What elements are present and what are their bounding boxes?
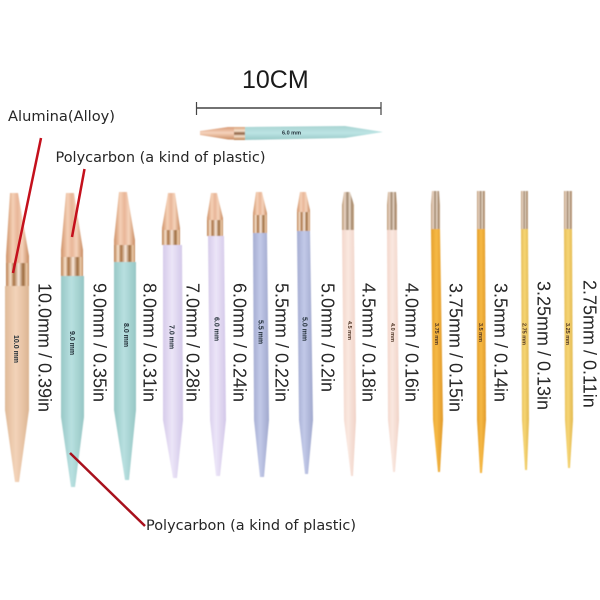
needle 9.0 mm [61,193,84,487]
callout text: polycarbon lower: Polycarbon (a kind of plastic) [146,518,356,534]
needle 7.0 mm [162,193,183,478]
needle 3.75 mm: 3.75 mm [433,323,439,345]
label 4.5mm: 4.5mm / 0.18in [358,283,378,402]
needle 3.5 mm: 3.5 mm [477,323,483,342]
label 8.0mm: 8.0mm / 0.31in [140,283,160,402]
label 3.75mm: 3.75mm / 0.15in [446,283,466,412]
callout text: polycarbon upper: Polycarbon (a kind of plastic) [56,150,266,166]
needle 2.75 mm mark: 2.75 mm [520,323,526,345]
needle 6.0 mm [207,193,226,476]
label 4.0mm: 4.0mm / 0.16in [402,283,422,402]
label 10.0mm: 10.0mm / 0.39in [34,283,54,412]
needle 9.0 mm: 9.0 mm [68,331,75,355]
needle 3.25 mm mark: 3.25 mm [564,323,570,345]
needle 10.0 mm: 10.0 mm [12,335,19,363]
label 5.5mm: 5.5mm / 0.22in [272,283,292,402]
needle 5.5 mm [253,192,269,477]
callout line: polycarbon upper [72,169,84,237]
needle 3.25 mm mark [564,191,573,468]
needle 2.75 mm mark [520,191,529,470]
needle 5.0 mm [297,192,313,474]
needle 3.5 mm [477,191,486,473]
label 3.5mm: 3.5mm / 0.14in [490,283,510,402]
label 2.75mm: 2.75mm / 0.11in [580,280,600,408]
needle 7.0 mm: 7.0 mm [168,325,174,349]
needle 5.0 mm: 5.0 mm [300,317,308,341]
sample needle: 6.0 mm [282,130,301,136]
label 6.0mm: 6.0mm / 0.24in [230,283,250,402]
label 9.0mm: 9.0mm / 0.35in [90,283,110,402]
needle 8.0 mm [114,192,136,480]
needle 3.75 mm [431,191,443,472]
label 3.25mm: 3.25mm / 0.13in [534,281,554,410]
callout line: alumina [13,138,41,273]
needle 8.0 mm: 8.0 mm [122,323,129,347]
callout line: polycarbon lower [70,453,145,526]
needle 4.5 mm: 4.5 mm [346,321,352,340]
needle 4.5 mm [342,192,356,476]
callout text: alumina: Alumina(Alloy) [8,109,115,125]
title: 10CM: 10CM [242,66,309,94]
needle 6.0 mm: 6.0 mm [212,317,220,341]
sample needle [200,126,383,140]
needle 4.0 mm: 4.0 mm [389,323,395,342]
needle 4.0 mm [387,192,399,472]
label 7.0mm: 7.0mm / 0.28in [182,283,202,402]
needle 5.5 mm: 5.5 mm [256,320,264,344]
label 5.0mm: 5.0mm / 0.2in [318,283,338,392]
needle 10.0 mm [5,193,29,482]
scale bar [196,102,381,115]
